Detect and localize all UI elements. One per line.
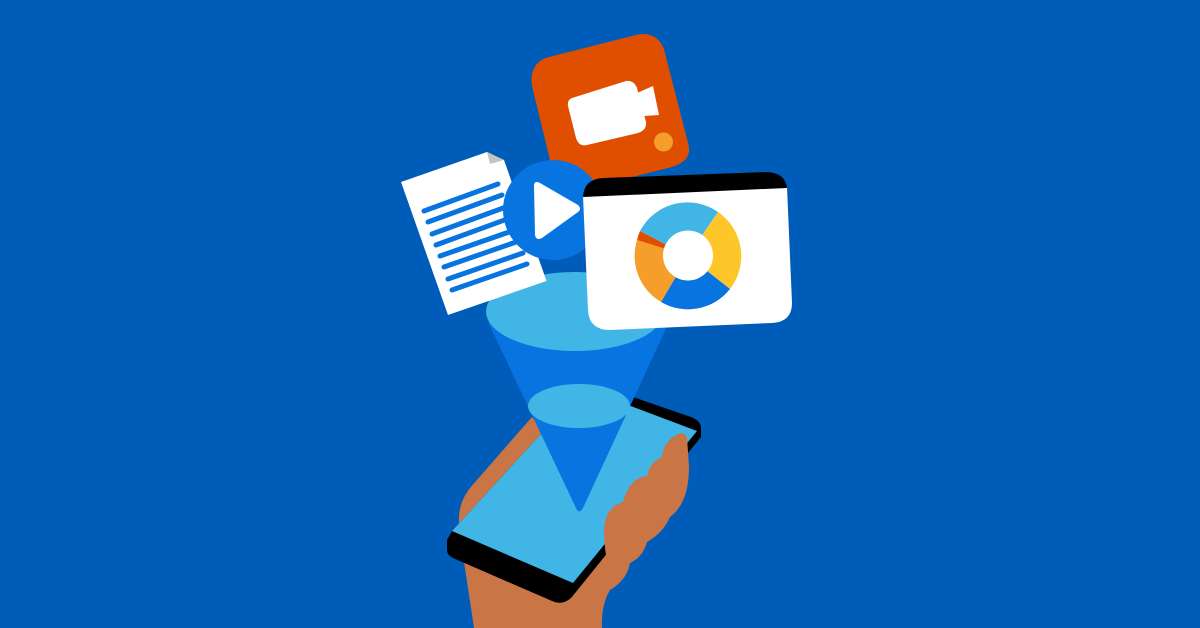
icon: phone: [447, 388, 701, 603]
page fold: [487, 152, 504, 164]
icon: document: [401, 152, 546, 315]
icon: fingers gripping the phone: [572, 433, 689, 597]
donut hole: [663, 230, 713, 280]
icon: play button: [503, 160, 603, 260]
play circle: [503, 160, 603, 260]
segment: yellow: [688, 212, 741, 289]
phone screen: [452, 388, 697, 583]
play triangle: [534, 182, 580, 239]
funnel cone: [488, 322, 669, 512]
funnel middle ellipse: [528, 384, 630, 428]
camera body: [568, 81, 646, 145]
phone body: [447, 388, 701, 603]
icon: hand back and palm: [459, 417, 640, 628]
segment: red: [637, 231, 688, 256]
funnel top opening: [486, 272, 664, 351]
text lines: [424, 184, 527, 290]
donut chart: [635, 202, 741, 309]
tile: [531, 34, 689, 193]
panel: chart window: [583, 172, 792, 330]
funnel: [486, 272, 669, 512]
icon: video camera tile: [531, 34, 689, 193]
window body: [583, 187, 792, 330]
page: [401, 152, 546, 315]
segment: orange: [635, 240, 688, 302]
segment: light blue: [640, 202, 718, 256]
record dot: [654, 132, 673, 152]
segment: blue: [661, 256, 730, 309]
camera lens: [637, 86, 659, 116]
window title bar: [583, 172, 787, 197]
